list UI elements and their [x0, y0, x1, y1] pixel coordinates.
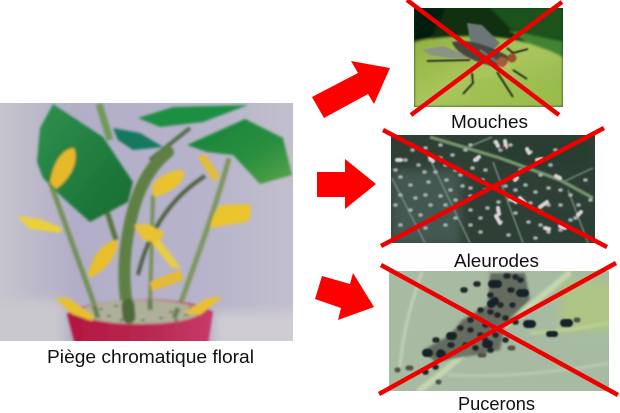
leaves: [37, 104, 133, 222]
photo: aphids on light leaf: [389, 271, 620, 391]
red cross: aphids: [379, 263, 618, 395]
gravel soil: [80, 300, 200, 324]
photo: floral chromatic trap plant: [0, 103, 303, 350]
fly: [422, 46, 473, 58]
photo: fly on leaf: [414, 8, 563, 107]
photo: whiteflies on dark leaf: [391, 135, 595, 245]
label: floral trap: Piège chromatique floral: [47, 346, 254, 367]
arrow: to aphids: [315, 273, 374, 320]
aphid cluster shadow: [423, 273, 530, 362]
arrow: to whiteflies: [317, 159, 376, 209]
red cross: whiteflies: [381, 128, 607, 247]
label: whiteflies: Aleurodes: [454, 250, 539, 271]
pot: [67, 299, 213, 345]
label: flies: Mouches: [451, 111, 528, 132]
central stalk: [124, 152, 168, 312]
yellow flowers: [50, 148, 76, 189]
arrow: to flies: [312, 61, 390, 118]
red cross: flies: [407, 0, 562, 115]
stems: [47, 182, 98, 306]
